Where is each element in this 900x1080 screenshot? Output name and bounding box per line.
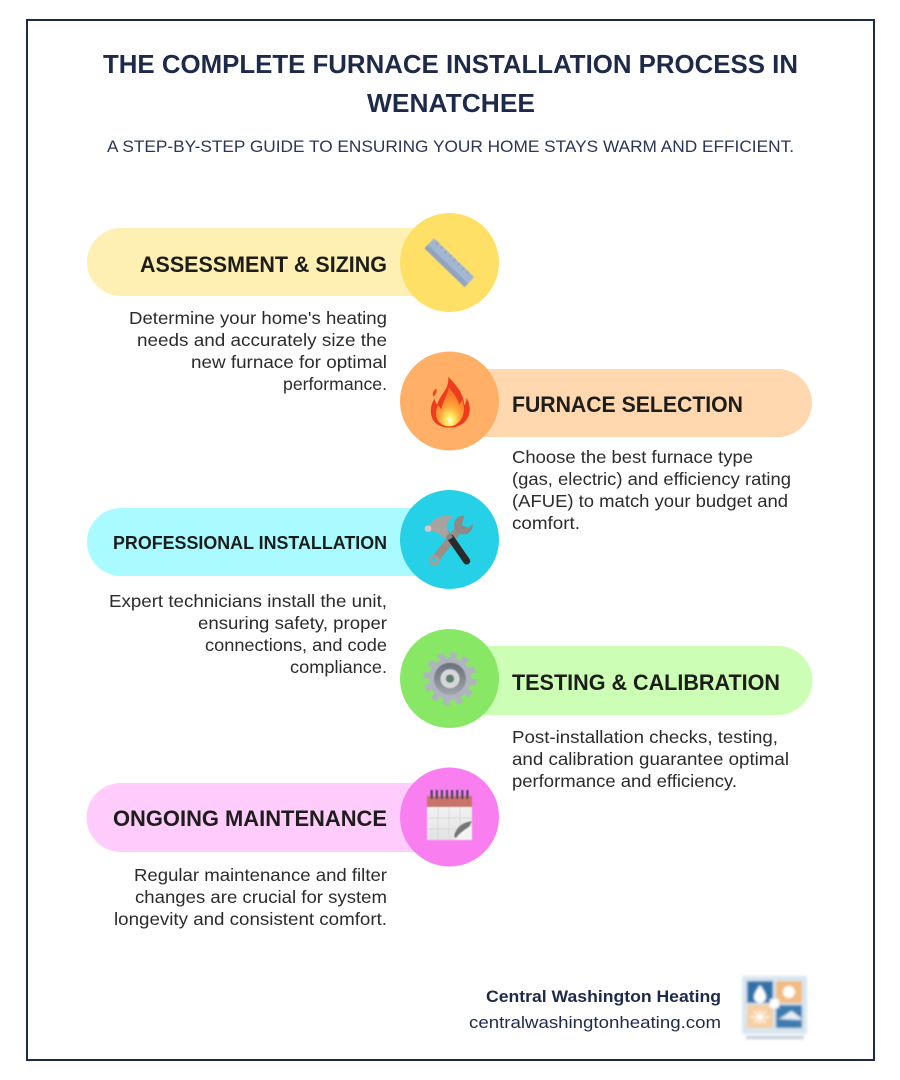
step 2 description (512, 447, 791, 533)
step 5 description: longevity and consistent comfort. (114, 909, 387, 929)
step 2 heading: FURNACE SELECTION (512, 392, 743, 417)
step 2 description: Choose the best furnace type (512, 447, 753, 467)
step 5 circle (400, 768, 499, 866)
logo (742, 976, 807, 1039)
step 1 description: needs and accurately size the (137, 330, 387, 350)
step 4 description: Post-installation checks, testing, (512, 727, 778, 747)
step 3 circle (400, 490, 499, 589)
icon: hammer and wrench (425, 513, 477, 566)
step 1 heading: ASSESSMENT & SIZING (140, 252, 387, 277)
step 3: professional installation (87, 490, 499, 677)
step 1 circle (400, 213, 499, 312)
footer brand text: Central Washington Heating (486, 988, 721, 1006)
step 3 description: compliance. (290, 657, 387, 677)
step 4: testing and calibration (400, 629, 813, 791)
icon: ruler (424, 238, 474, 287)
step 2 pill (450, 369, 812, 437)
step 5 description: changes are crucial for system (135, 887, 387, 907)
step 1 pill (87, 228, 450, 296)
step 4 description (512, 727, 789, 791)
step 3 pill (87, 508, 450, 576)
title: THE COMPLETE FURNACE INSTALLATION PROCESS IN (103, 49, 798, 79)
step 5 heading: ONGOING MAINTENANCE (113, 806, 387, 831)
footer brand text: centralwashingtonheating.com (469, 1014, 721, 1032)
step 4 description: performance and efficiency. (512, 771, 737, 791)
step 1: assessment and sizing (87, 213, 499, 394)
step 1 description: Determine your home's heating (129, 308, 387, 328)
title (103, 49, 798, 118)
title: WENATCHEE (367, 88, 535, 118)
subtitle: A STEP-BY-STEP GUIDE TO ENSURING YOUR HOME STAYS WARM AND EFFICIENT. (107, 137, 794, 156)
step 1 description: performance. (283, 374, 387, 394)
footer brand text (469, 988, 721, 1032)
icon: calendar (427, 790, 472, 840)
step 3 description: ensuring safety, proper (198, 613, 387, 633)
step 4 description: and calibration guarantee optimal (512, 749, 789, 769)
step 1 description: new furnace for optimal (191, 352, 387, 372)
step 3 description (109, 591, 387, 677)
step 3 description: Expert technicians install the unit, (109, 591, 387, 611)
step 5 description: Regular maintenance and filter (134, 865, 387, 885)
step 2: furnace selection (400, 352, 812, 533)
step 1 description (129, 308, 387, 394)
step 2 circle (400, 352, 499, 450)
step 4 circle (400, 629, 499, 728)
step 2 description: (gas, electric) and efficiency rating (512, 469, 791, 489)
icon: flame (431, 377, 470, 428)
step 5 pill (87, 783, 450, 852)
step 5: ongoing maintenance (87, 768, 499, 929)
icon: gear (427, 656, 473, 702)
step 2 description: (AFUE) to match your budget and (512, 491, 788, 511)
step 4 heading: TESTING & CALIBRATION (512, 670, 780, 695)
step 3 heading: PROFESSIONAL INSTALLATION (113, 532, 387, 553)
step 5 description (114, 865, 387, 929)
step 3 description: connections, and code (205, 635, 387, 655)
step 4 pill (450, 646, 813, 715)
step 2 description: comfort. (512, 513, 580, 533)
